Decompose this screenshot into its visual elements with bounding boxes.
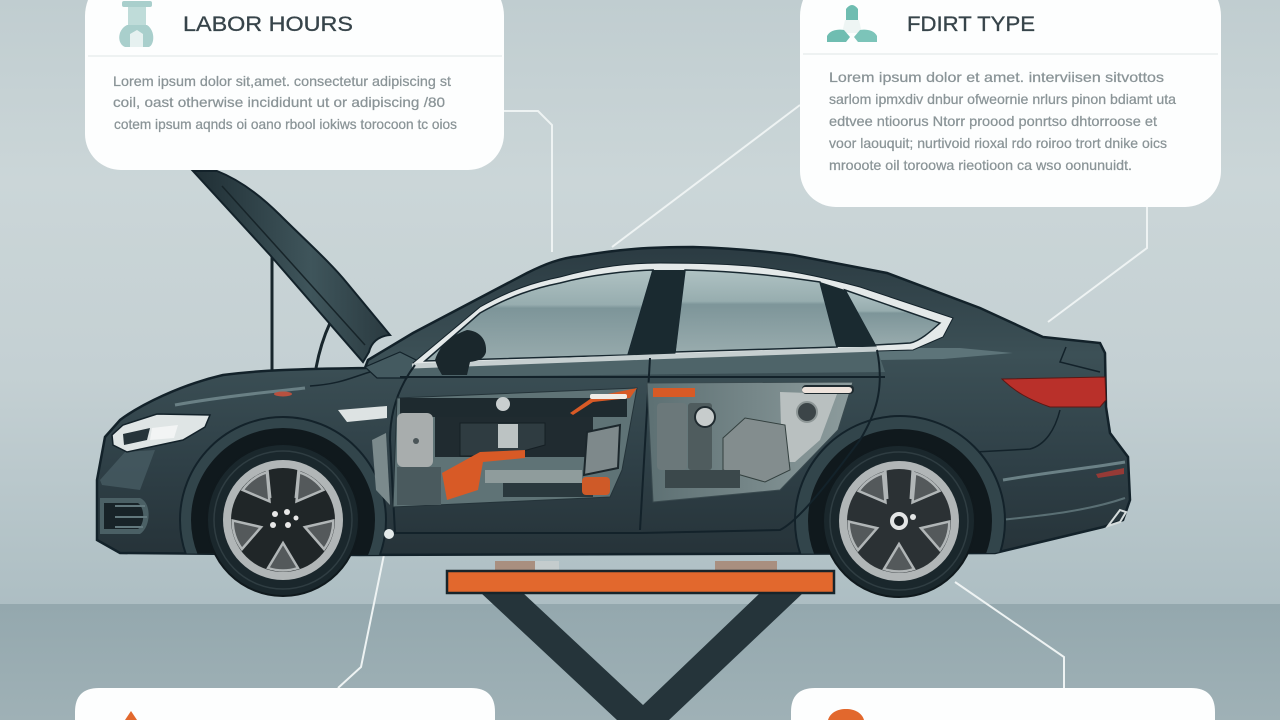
- rear reflector: [1096, 468, 1124, 478]
- headlight: [112, 414, 210, 452]
- rear door cutaway: [647, 382, 854, 502]
- text block: labor hours: [113, 73, 457, 132]
- icon: orange bottom right: [828, 709, 864, 720]
- hood props: [272, 255, 330, 371]
- front window: [425, 270, 653, 361]
- scissor legs: [481, 593, 803, 720]
- heading: part type: FDIRT TYPE: [907, 13, 1035, 36]
- panel: bottom right: [791, 688, 1215, 720]
- car body: [97, 247, 1130, 555]
- text block: labor hours: coil, oast otherwise incididunt ut or adipiscing /80: [113, 94, 445, 110]
- door seams: [390, 350, 885, 533]
- anchor dot: [384, 529, 394, 539]
- text block: part type: Lorem ipsum dolor et amet. interviisen sitvottos: [829, 69, 1164, 85]
- side mirror: [435, 330, 486, 375]
- front wheel: [207, 444, 359, 596]
- exhaust: [1108, 510, 1126, 526]
- cowl lip: [365, 352, 420, 378]
- panel: labor hours: [85, 0, 504, 170]
- text block: part type: mrooote oil toroowa rieotioon ca wso oonunuidt.: [829, 157, 1132, 173]
- body highlights: [175, 372, 1125, 520]
- orange lift beam: [447, 571, 834, 593]
- trunk spoiler line: [1060, 347, 1100, 372]
- car: [96, 246, 1132, 556]
- front bumper shading: [100, 450, 155, 490]
- sill trim panel: [372, 433, 390, 505]
- text block: labor hours: cotem ipsum aqnds oi oano rbool iokiws torocoon tc oios: [114, 116, 457, 132]
- front door cutaway: [393, 388, 637, 507]
- text block: part type: sarlom ipmxdiv dnbur ofweornie nrlurs pinon bdiamt uta: [829, 91, 1176, 107]
- panel: part type: [800, 0, 1221, 207]
- panel: bottom left: [75, 688, 495, 720]
- icon: labor hours: [119, 1, 153, 47]
- window pillars: [628, 270, 877, 357]
- text block: part type: voor laouquit; nurtivoid rioxal rdo roiroo trort dnike oics: [829, 135, 1167, 151]
- middle window: [675, 270, 837, 352]
- icon: orange bottom left: [125, 711, 137, 720]
- text block: labor hours: Lorem ipsum dolor sit,amet. consectetur adipiscing st: [113, 73, 451, 89]
- rear quarter window: [845, 290, 940, 345]
- tail light: [1002, 377, 1106, 407]
- fender side marker: [338, 406, 387, 422]
- connector lines: [338, 105, 1147, 688]
- lift stand: [447, 561, 834, 720]
- rear wheel: [823, 445, 975, 597]
- text block: part type: edtvee ntioorus Ntorr proood ponrtso dhtorroose et: [829, 113, 1157, 129]
- wheel wells: [179, 415, 1006, 555]
- lower window strip: [408, 349, 885, 377]
- heading: labor hours: LABOR HOURS: [183, 13, 353, 36]
- orange fender marker: [274, 392, 292, 396]
- icon: part type: [827, 5, 877, 42]
- text block: part type: [829, 69, 1176, 173]
- open hood: [193, 171, 390, 362]
- front bumper grille: [100, 498, 149, 534]
- lift pads: [495, 561, 777, 572]
- rear shoulder highlight: [873, 348, 1013, 360]
- chrome window trim: [413, 263, 953, 366]
